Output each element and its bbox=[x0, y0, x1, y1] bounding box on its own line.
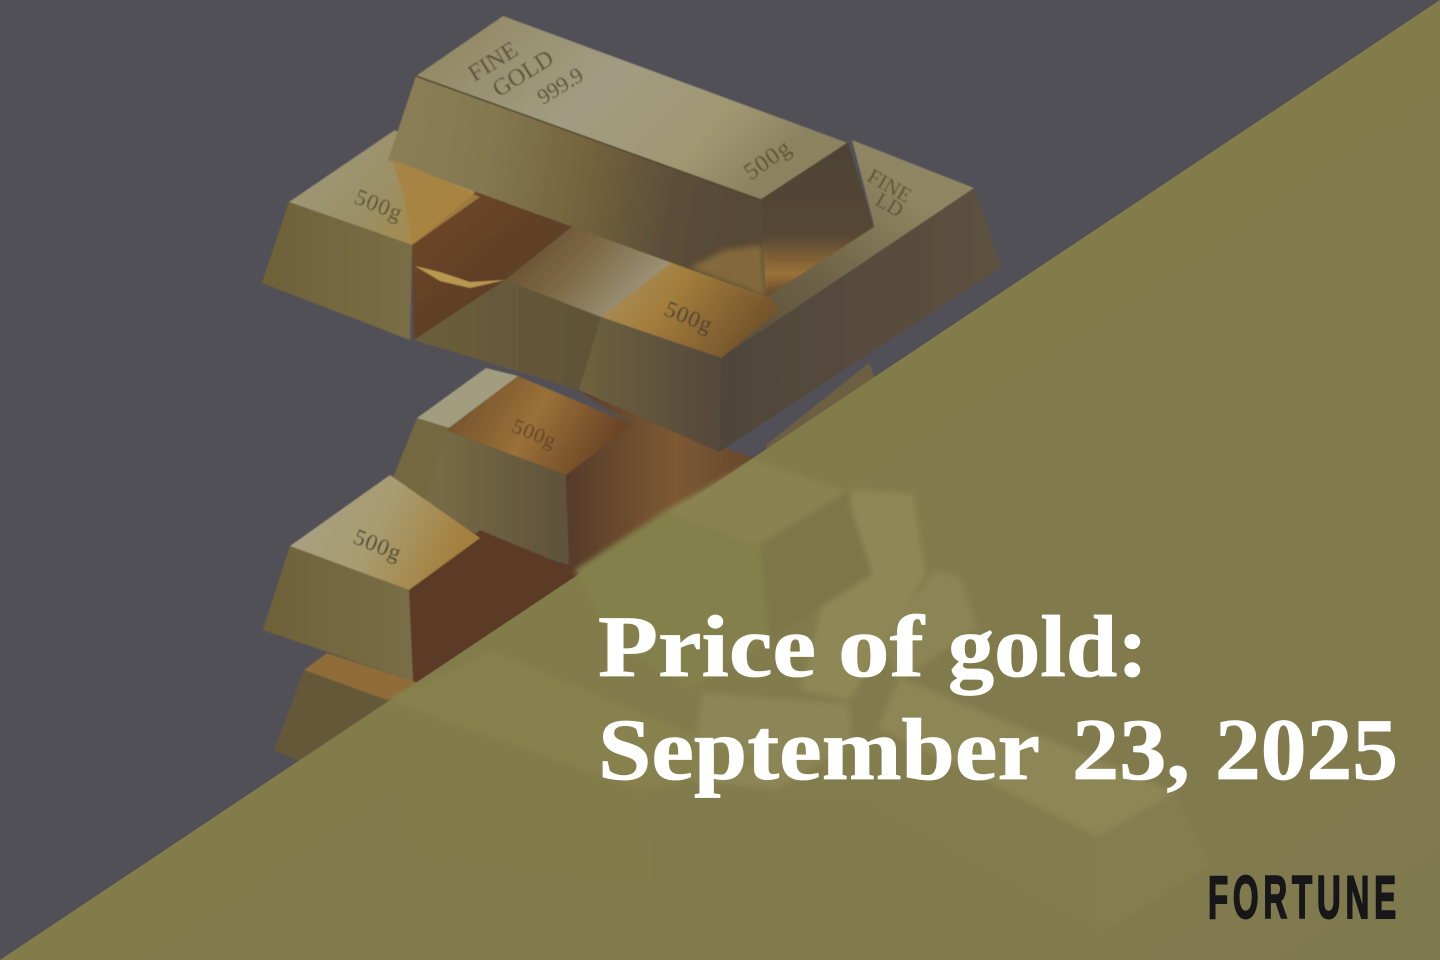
logo: FORTUNE: FORTUNE bbox=[1208, 865, 1396, 932]
engraved text: FINE GOLD 999.9: FINE bbox=[464, 37, 523, 87]
gold bar: top bar end face bbox=[761, 143, 874, 297]
faded bar: side small bbox=[880, 570, 977, 680]
faded bar: right low side bbox=[1098, 792, 1210, 934]
engraved text: FINE GOLD 999.9: 999.9 bbox=[532, 62, 588, 109]
title word: of: of bbox=[838, 599, 926, 696]
faded bar: large left top bbox=[387, 651, 760, 792]
photo: gold bars lower stack bbox=[263, 368, 790, 762]
engraved text: 500g upper left: 500g bbox=[351, 184, 407, 226]
engraved text: 500g right bar: 500g bbox=[661, 296, 717, 338]
gold bar: upper left top face bbox=[289, 130, 481, 245]
photo: faded gold bars through overlay bbox=[387, 461, 1210, 934]
engraved text: FINE GOLD 999.9: GOLD bbox=[488, 45, 558, 103]
gold bar: mirrored middle panel bbox=[505, 225, 680, 317]
gold bar: reflective streak bbox=[415, 266, 505, 288]
title word: 23,: 23, bbox=[1072, 702, 1190, 799]
title bbox=[598, 599, 1398, 799]
faded bar: right low top bbox=[878, 678, 1175, 836]
gold bar: reflection under top bar bbox=[392, 160, 480, 245]
gold bar: left bar front face bbox=[263, 546, 413, 681]
gold bar: right bar front face bbox=[579, 317, 721, 452]
gold bar: copper top face bbox=[446, 376, 633, 475]
gold bar: top bar long side bbox=[388, 76, 766, 297]
faded bar: middle block bbox=[690, 693, 853, 796]
gold bar: left bar dark side bbox=[409, 530, 600, 700]
gold bar: pale back sliver bbox=[417, 368, 518, 430]
faded bar: upper front bbox=[575, 511, 770, 690]
engraved text: 500g lower: 500g bbox=[350, 524, 406, 566]
gold bar: reflected glow on top bar bbox=[690, 245, 766, 297]
photo: gold bars upper stack bbox=[262, 16, 1001, 480]
engraved text: FINE GOLD 999.9 bbox=[464, 37, 588, 109]
gold bar: bottom bar front bbox=[274, 670, 430, 762]
gold bar: left sliver bbox=[390, 418, 450, 520]
gold bar: edge highlights bbox=[416, 76, 848, 200]
engraved text: 500g top bar: 500g bbox=[739, 135, 797, 186]
gold bar: right bar top face near bbox=[601, 262, 780, 358]
gold bar: front face bbox=[422, 430, 569, 565]
faded bar: upper top bbox=[665, 461, 846, 544]
gold bar: mirrored right face bbox=[560, 385, 790, 600]
gold bar: right bar side face bbox=[719, 188, 1001, 452]
faded bar: upper side bbox=[760, 492, 872, 640]
gold bar: left bar top face bbox=[290, 475, 480, 590]
gold bar: mirrored copper panel bbox=[412, 190, 580, 340]
faded bar: right low front bbox=[760, 727, 1101, 934]
title word: gold:: gold: bbox=[948, 599, 1148, 696]
gold bar: bottom reflection top bbox=[304, 653, 430, 700]
title word: Price: Price bbox=[598, 599, 816, 696]
faded bar: far back bbox=[800, 490, 926, 700]
gold bar: upper left front face bbox=[262, 202, 412, 340]
gold bar: hidden bar behind the stack bbox=[766, 363, 885, 480]
engraved text: LD partly hidden: LD bbox=[872, 188, 908, 222]
faded bar: large left front bbox=[400, 712, 652, 888]
engraved text: 500g copper: 500g bbox=[509, 414, 560, 453]
gold bar: top bar top face bbox=[416, 16, 848, 200]
gold bar: right bar back face bbox=[721, 140, 974, 358]
engraved text: FINE partly hidden: FINE bbox=[864, 164, 916, 208]
title word: September: September bbox=[598, 702, 1040, 799]
title word: 2025: 2025 bbox=[1215, 702, 1398, 799]
gold bar: middle front face bbox=[414, 280, 601, 390]
